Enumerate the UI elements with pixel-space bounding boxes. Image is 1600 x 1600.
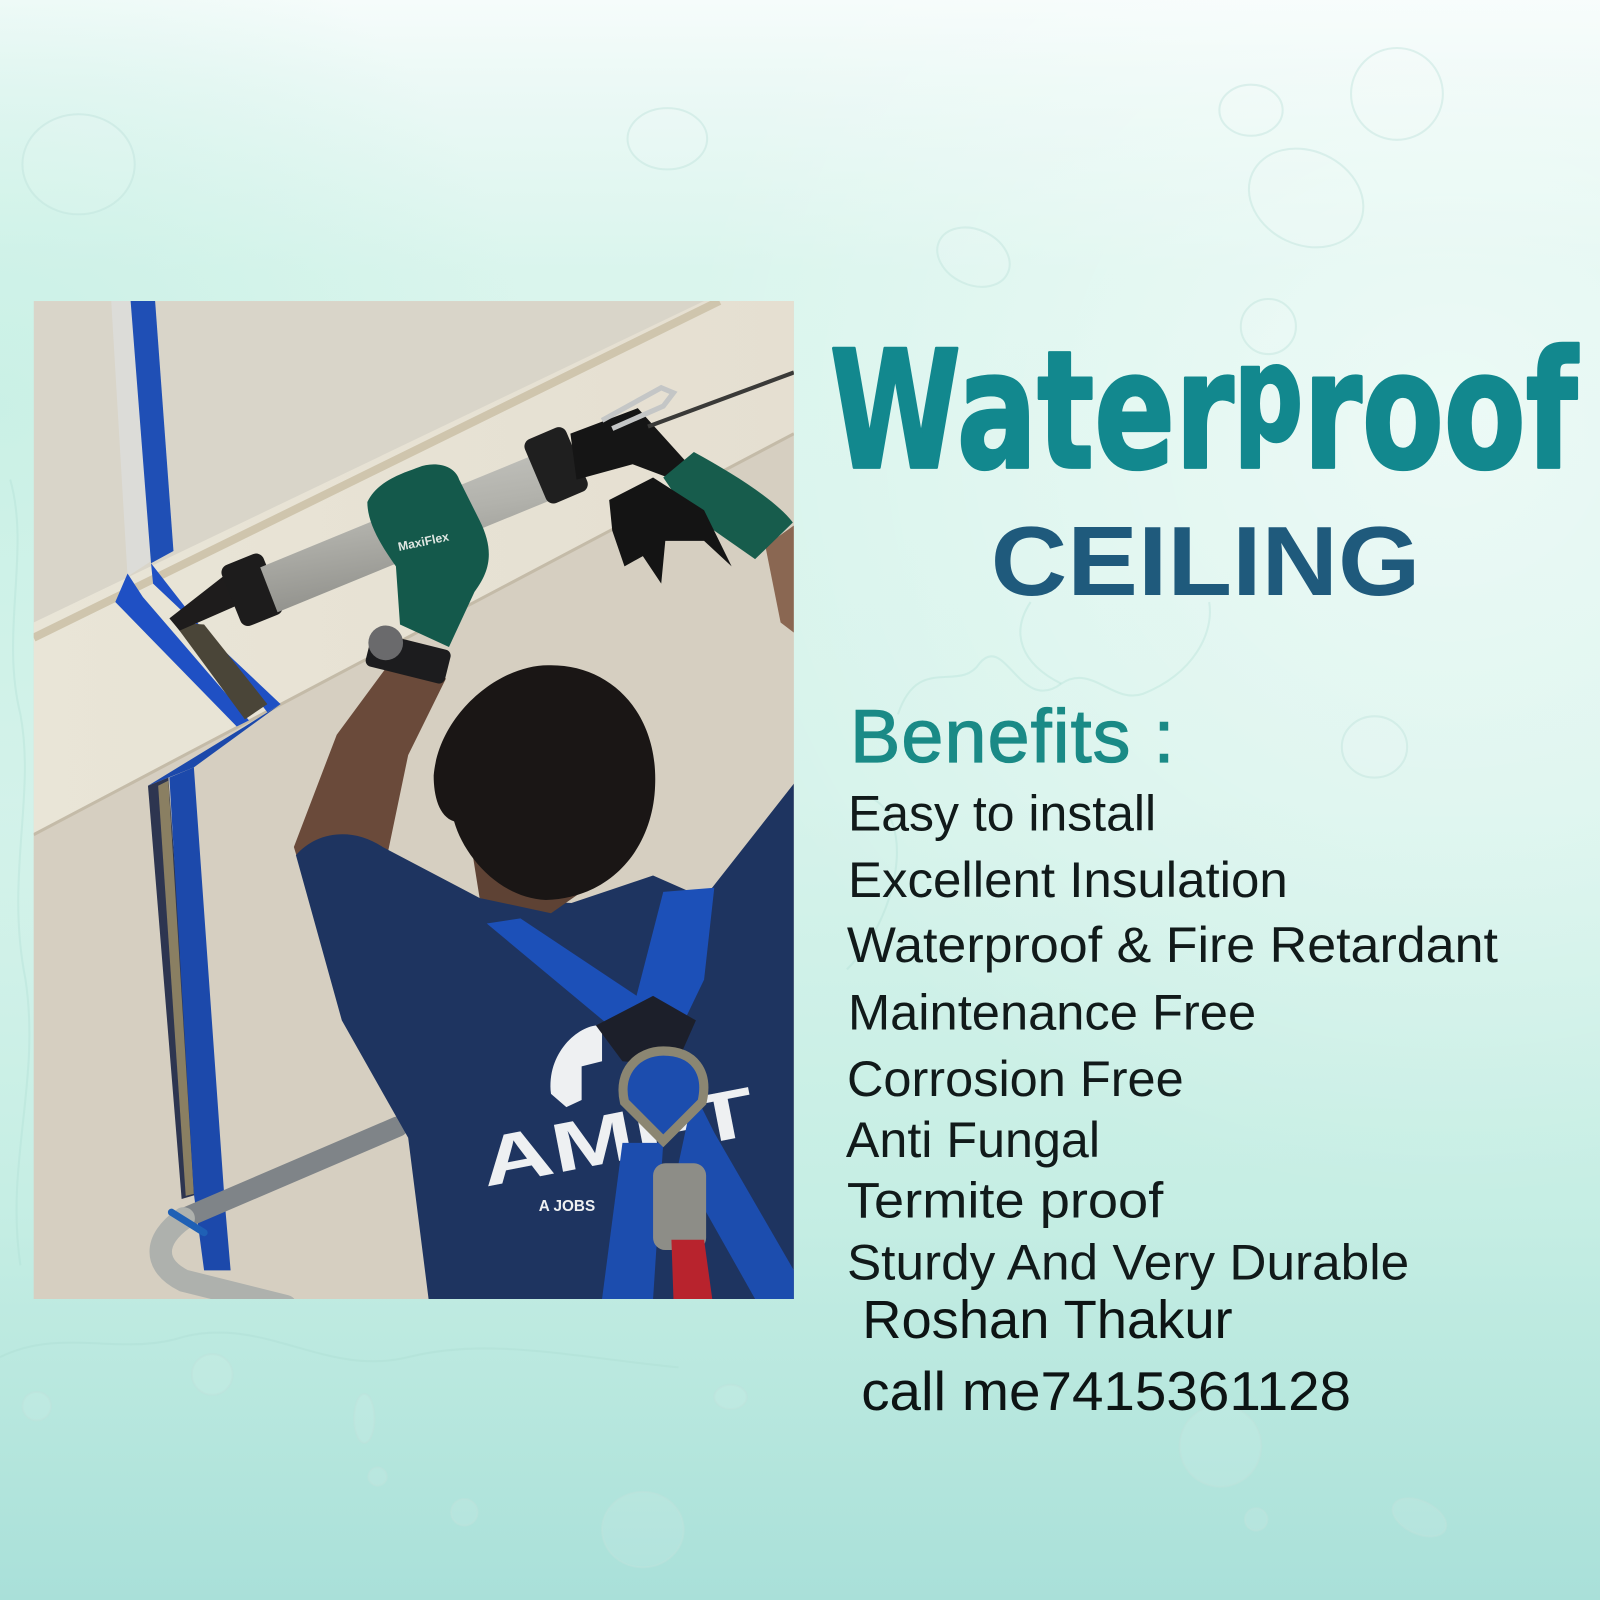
glove label: MaxiFlex — [397, 529, 450, 554]
worker head and neck — [434, 665, 655, 913]
left green glove — [367, 464, 489, 647]
benefits list: Maintenance Free — [848, 985, 1256, 1041]
title: Waterproof: p — [1234, 318, 1303, 472]
scaffold rail — [161, 1127, 398, 1306]
subtitle: CEILING: CEILING — [991, 506, 1420, 616]
title: Waterproof: Water — [830, 315, 1383, 506]
benefits list: Termite proof — [847, 1172, 1163, 1228]
shirt logo lettering: AMFT — [474, 1072, 761, 1201]
caulking gun — [169, 372, 794, 631]
benefits list: Excellent Insulation — [848, 852, 1288, 908]
benefits list: Waterproof & Fire Retardant — [847, 917, 1498, 973]
photo: worker sealing a joint — [34, 301, 794, 1306]
water splash decoration — [0, 480, 1210, 1367]
benefits list: Corrosion Free — [847, 1051, 1184, 1107]
benefits list: Easy to install — [848, 786, 1156, 842]
blue masking tape and sealant joint — [111, 301, 281, 1270]
photo wall background — [34, 301, 794, 1299]
benefits list: Anti Fungal — [846, 1112, 1100, 1168]
contact name: Roshan Thakur — [862, 1290, 1233, 1350]
contact phone: call me7415361128 — [861, 1360, 1351, 1422]
shirt logo — [488, 1025, 750, 1211]
right hand and arm — [609, 452, 794, 633]
benefits list — [846, 786, 1498, 1291]
heading: Benefits: Benefits : — [850, 695, 1174, 779]
worker shirt — [296, 784, 794, 1299]
safety harness — [487, 888, 794, 1299]
left arm with watch — [294, 626, 451, 855]
shirt logo: A JOBS — [539, 1198, 595, 1215]
benefits list: Sturdy And Very Durable — [847, 1235, 1409, 1291]
